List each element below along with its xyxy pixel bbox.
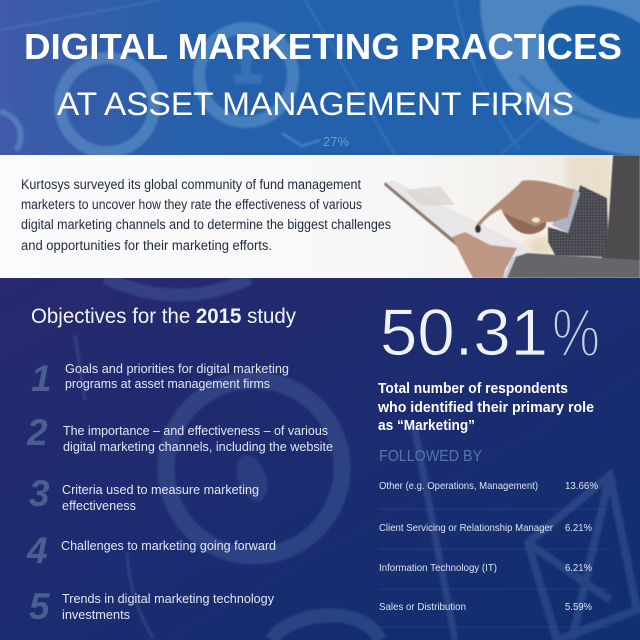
objective 3 xyxy=(29,473,259,514)
photo: hands using a tablet xyxy=(384,155,640,278)
objective 5: 5 xyxy=(29,586,51,627)
row: client servicing: 6.21% xyxy=(565,522,592,534)
title: DIGITAL MARKETING PRACTICES xyxy=(24,26,622,67)
objective 2: 2 xyxy=(26,412,48,453)
row: information technology xyxy=(379,562,592,574)
intro text: digital marketing channels and to determine the biggest challenges xyxy=(21,217,391,232)
objective 5: investments xyxy=(62,607,130,622)
intro text: Kurtosys surveyed its global community of fund management xyxy=(21,177,361,192)
objective 3: 3 xyxy=(29,473,50,514)
objective 1: 1 xyxy=(31,358,52,399)
subtitle: AT ASSET MANAGEMENT FIRMS xyxy=(57,86,574,122)
objective 1: Goals and priorities for digital marketing xyxy=(65,361,289,376)
intro text: and opportunities for their marketing efforts. xyxy=(21,238,272,253)
statistic description xyxy=(377,380,594,434)
objectives list xyxy=(26,358,333,627)
heading: objectives: Objectives for the 2015 study xyxy=(31,305,296,328)
objective 1 xyxy=(31,358,289,399)
big statistic: 50.31 xyxy=(380,295,548,369)
row: sales: Sales or Distribution xyxy=(379,601,466,613)
lower panel background xyxy=(0,278,640,640)
row: sales xyxy=(379,601,592,613)
objective 1: programs at asset management firms xyxy=(65,376,270,391)
intro text xyxy=(21,177,391,253)
objective 3: Criteria used to measure marketing xyxy=(62,482,259,497)
followed by heading: FOLLOWED BY xyxy=(379,448,482,465)
panel: introduction xyxy=(0,155,640,278)
row: client servicing: Client Servicing or Relationship Manager xyxy=(379,522,553,534)
icon: key shape in ring xyxy=(234,50,262,84)
big statistic: % xyxy=(552,295,600,371)
objective 5: Trends in digital marketing technology xyxy=(62,591,274,606)
large ring xyxy=(480,0,640,155)
objective 2 xyxy=(26,412,333,454)
row: information technology: 6.21% xyxy=(565,562,592,574)
objective 5 xyxy=(29,586,274,627)
header banner background xyxy=(0,0,640,155)
statistic description: as “Marketing” xyxy=(378,417,475,434)
objective 4: Challenges to marketing going forward xyxy=(61,538,276,553)
row: other: Other (e.g. Operations, Management) xyxy=(379,480,538,492)
row: other: 13.66% xyxy=(565,480,598,492)
objective 3: effectiveness xyxy=(62,498,136,513)
statistic description: Total number of respondents xyxy=(378,380,568,397)
row: sales: 5.59% xyxy=(565,601,592,613)
objective 2: The importance – and effectiveness – of various xyxy=(63,423,328,438)
objective 4: 4 xyxy=(26,530,48,571)
objective 4 xyxy=(26,530,276,571)
row: information technology: Information Technology (IT) xyxy=(379,562,497,574)
label: 27 percent: 27% xyxy=(323,134,349,149)
intro text: marketers to uncover how they rate the effectiveness of various xyxy=(21,197,362,212)
table: other roles xyxy=(379,480,610,627)
objective 2: digital marketing channels, including the website xyxy=(63,439,333,454)
statistic description: who identified their primary role xyxy=(377,399,594,416)
